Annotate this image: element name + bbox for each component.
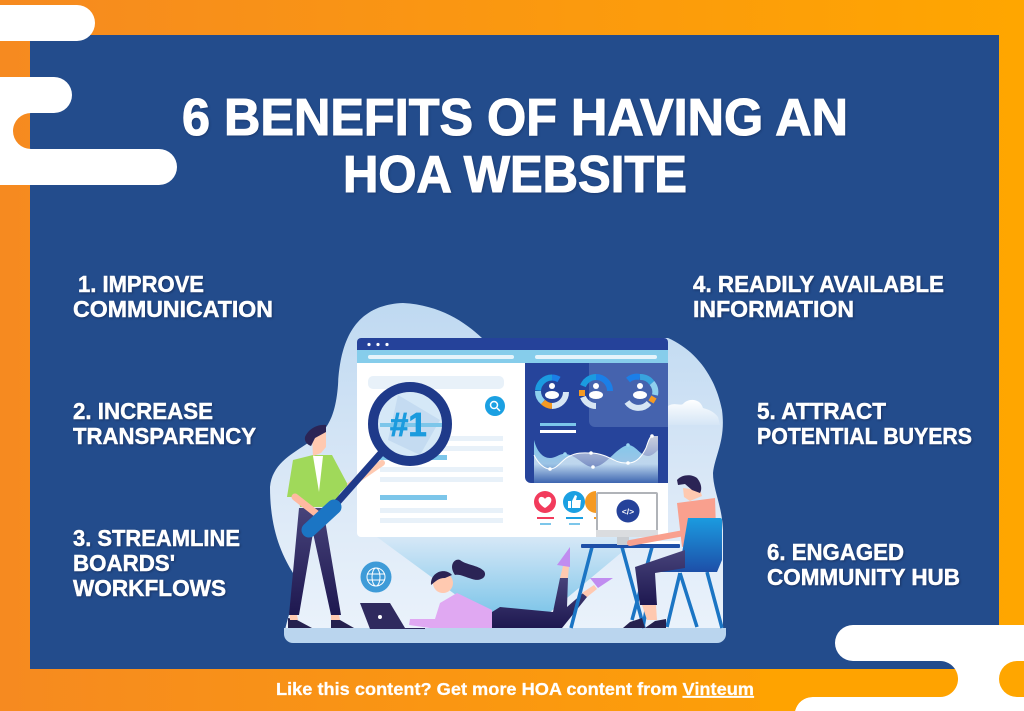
shoes	[557, 547, 613, 588]
chair	[647, 518, 722, 572]
benefit 5: 5. ATTRACT	[757, 398, 886, 424]
head	[312, 432, 326, 456]
laptop	[360, 603, 425, 629]
cloud	[668, 400, 720, 425]
person lying with laptop	[360, 547, 613, 629]
benefit 6: COMMUNITY HUB	[767, 564, 960, 590]
icon: heart reaction	[534, 491, 556, 525]
benefit 3: 3. STREAMLINE	[73, 525, 240, 551]
chair legs	[643, 572, 722, 628]
benefit 2	[73, 398, 256, 449]
arm	[630, 533, 684, 543]
area chart	[534, 434, 658, 483]
head	[683, 488, 702, 501]
magnifying glass	[309, 387, 447, 530]
arms	[295, 497, 322, 518]
footer call to action: Like this content? Get more HOA content from Vinteum	[276, 679, 754, 699]
desk and computer	[571, 492, 680, 628]
benefit 5: POTENTIAL BUYERS	[757, 423, 972, 449]
desk legs	[571, 547, 652, 628]
shoes	[623, 618, 666, 628]
title: HOA WEBSITE	[343, 146, 687, 204]
platform	[284, 628, 726, 643]
benefit 6: 6. ENGAGED	[767, 539, 904, 565]
magnifying glass: #1	[390, 406, 427, 443]
dashboard panel	[525, 363, 668, 483]
icon: search	[485, 396, 505, 416]
donut chart 1	[538, 377, 566, 406]
torso	[677, 498, 716, 547]
benefit 1: COMMUNICATION	[73, 296, 273, 322]
browser window	[357, 338, 668, 537]
white decorative pills: bottom right	[760, 625, 1024, 711]
pants	[289, 508, 341, 615]
monitor: </>	[622, 506, 634, 516]
title: 6 BENEFITS OF HAVING AN	[182, 89, 848, 147]
benefit 6	[767, 539, 960, 590]
legs	[635, 550, 685, 605]
benefit 3: WORKFLOWS	[73, 575, 226, 601]
benefit 4	[693, 271, 944, 322]
benefit 3	[73, 525, 240, 601]
white decorative pills: top left	[0, 5, 177, 185]
icon: globe	[360, 562, 392, 592]
icon: orange reaction	[585, 491, 597, 519]
benefit 2: 2. INCREASE	[73, 398, 213, 424]
icon: thumbs up reaction	[563, 491, 585, 525]
text placeholder lines	[380, 436, 503, 523]
benefit 2: TRANSPARENCY	[73, 423, 256, 449]
title	[182, 89, 848, 204]
donut chart 2	[582, 377, 610, 406]
torso and arm	[409, 593, 492, 628]
person with magnifying glass	[287, 387, 447, 628]
benefit 3: BOARDS'	[73, 550, 175, 576]
background blob	[270, 303, 723, 630]
seated person	[623, 475, 722, 628]
benefit 5	[757, 398, 972, 449]
benefit 1: 1. IMPROVE	[78, 271, 204, 297]
light blue band under window	[377, 537, 640, 620]
benefit 4: 4. READILY AVAILABLE	[693, 271, 944, 297]
benefit 4: INFORMATION	[693, 296, 854, 322]
shoes	[288, 618, 354, 628]
illustration	[270, 303, 726, 643]
benefit 1	[73, 271, 273, 322]
shirt	[287, 455, 348, 507]
legs	[492, 578, 595, 628]
donut chart 3	[627, 377, 655, 408]
head and hair	[433, 573, 453, 593]
